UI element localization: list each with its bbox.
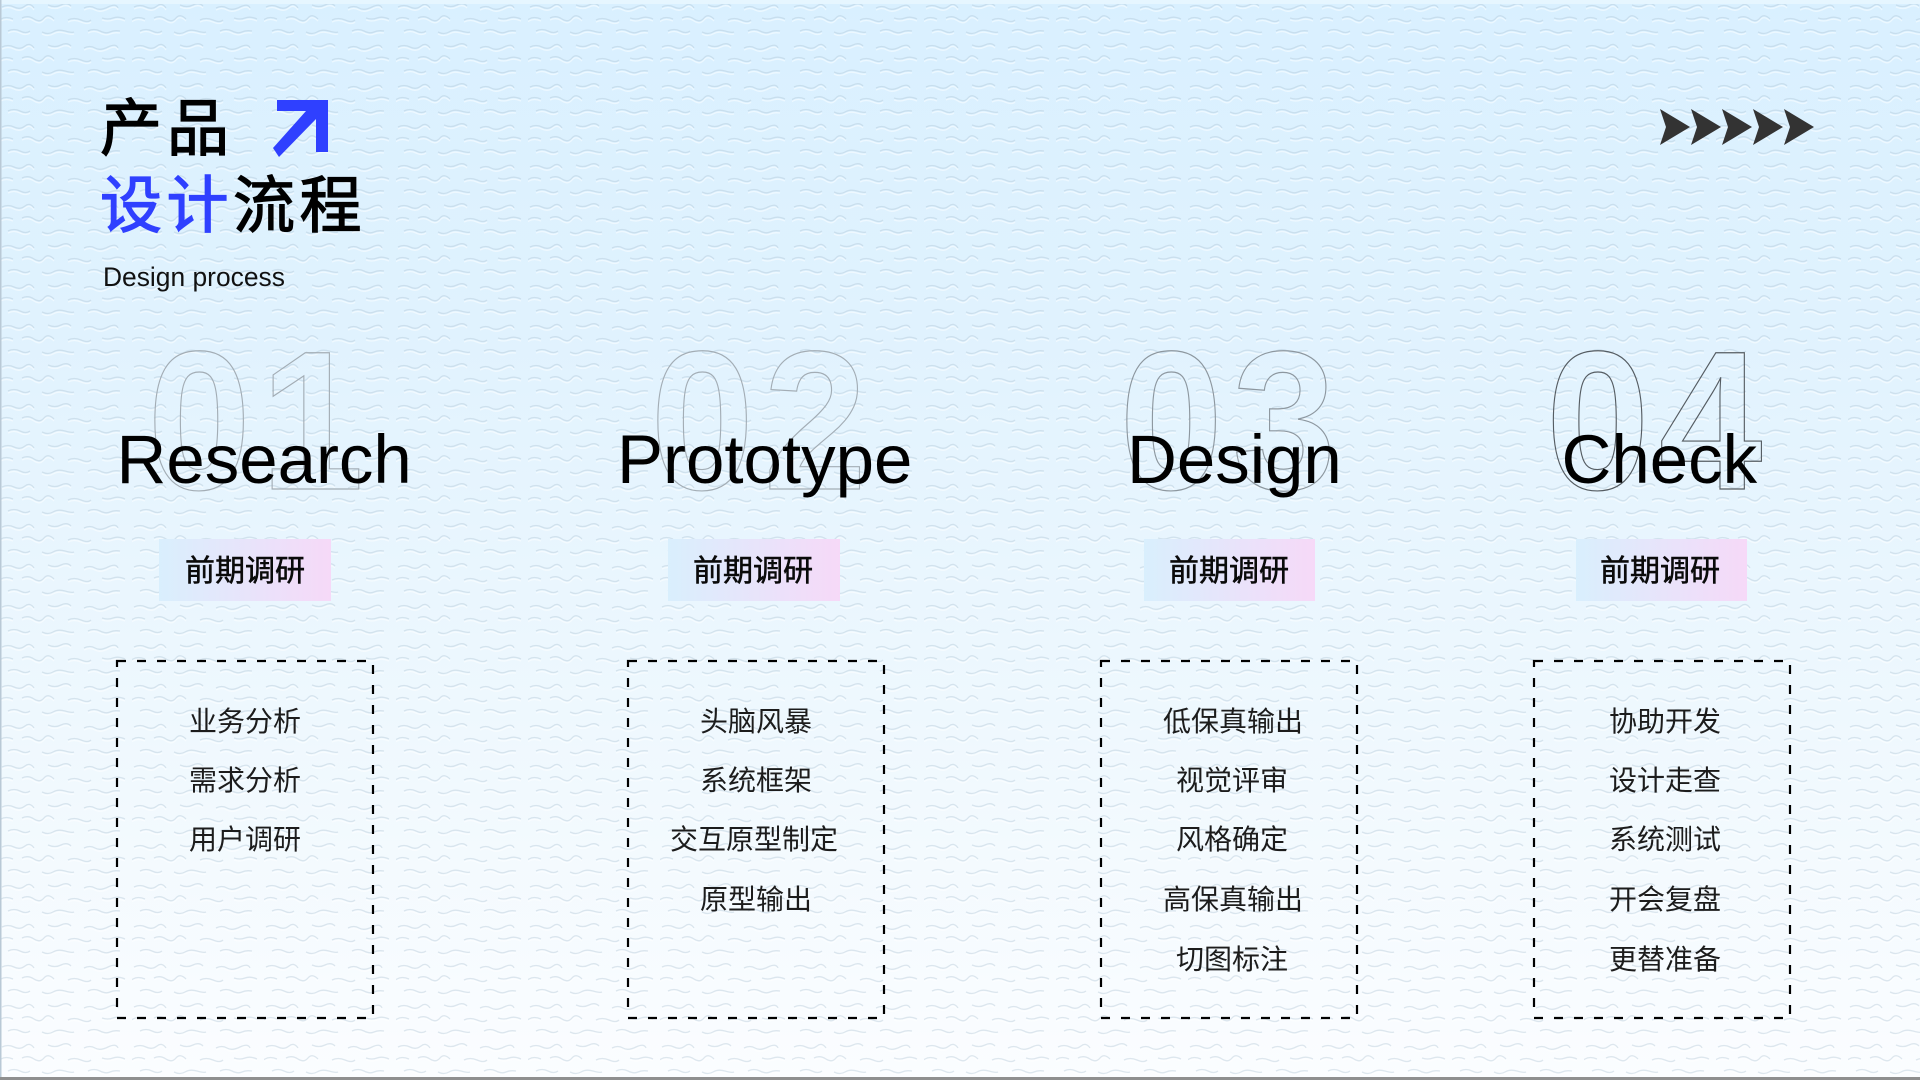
panel: check: [1534, 310, 1790, 1018]
dashed task box: 风格确定: [1176, 824, 1288, 855]
dashed task box: 业务分析: [189, 706, 301, 737]
panel: design: [1101, 310, 1357, 1018]
number 03: 03: [1120, 310, 1345, 531]
icon: up-right arrow: [273, 100, 328, 157]
dashed task box: 更替准备: [1609, 944, 1721, 975]
tag: 前期调研: [693, 555, 813, 588]
dashed task box: 高保真输出: [1163, 884, 1303, 915]
dashed task box: [1534, 661, 1790, 1018]
dashed task box: [117, 661, 373, 1018]
tag: [159, 539, 331, 601]
heading: Check: Check: [1562, 421, 1758, 498]
subtitle: Design process: [103, 262, 285, 292]
icon: five arrowheads: [1660, 109, 1814, 145]
dashed task box: [1101, 661, 1357, 1018]
tag: [668, 539, 840, 601]
number 01: 01: [148, 310, 373, 531]
heading: Design: Design: [1127, 421, 1342, 498]
dashed task box: 系统框架: [700, 765, 812, 796]
tag: [1576, 539, 1747, 601]
title line two: 设计流程: [100, 172, 366, 241]
heading: Research: Research: [116, 421, 412, 498]
dashed task box: 交互原型制定: [670, 824, 838, 855]
dashed task box: 设计走查: [1609, 765, 1721, 796]
panel: research: [116, 310, 412, 1018]
panel: prototype: [617, 310, 912, 1018]
number 02: 02: [650, 310, 876, 531]
dashed task box: 切图标注: [1176, 944, 1288, 975]
heading: Prototype: Prototype: [617, 421, 912, 498]
tag: 前期调研: [185, 555, 305, 588]
title: [100, 95, 366, 292]
dashed task box: 原型输出: [700, 884, 812, 915]
dashed task box: 低保真输出: [1163, 706, 1303, 737]
dashed task box: 用户调研: [189, 824, 301, 855]
dashed task box: 协助开发: [1609, 706, 1721, 737]
dashed task box: 开会复盘: [1609, 884, 1721, 915]
number 04: 04: [1546, 310, 1772, 531]
title line one: 产品: [100, 95, 234, 164]
dashed task box: 视觉评审: [1176, 765, 1288, 796]
dashed task box: 头脑风暴: [700, 706, 812, 737]
dashed task box: [628, 661, 884, 1018]
dashed task box: 系统测试: [1609, 824, 1721, 855]
dashed task box: 需求分析: [189, 765, 301, 796]
tag: 前期调研: [1169, 555, 1289, 588]
tag: 前期调研: [1600, 555, 1720, 588]
tag: [1144, 539, 1315, 601]
